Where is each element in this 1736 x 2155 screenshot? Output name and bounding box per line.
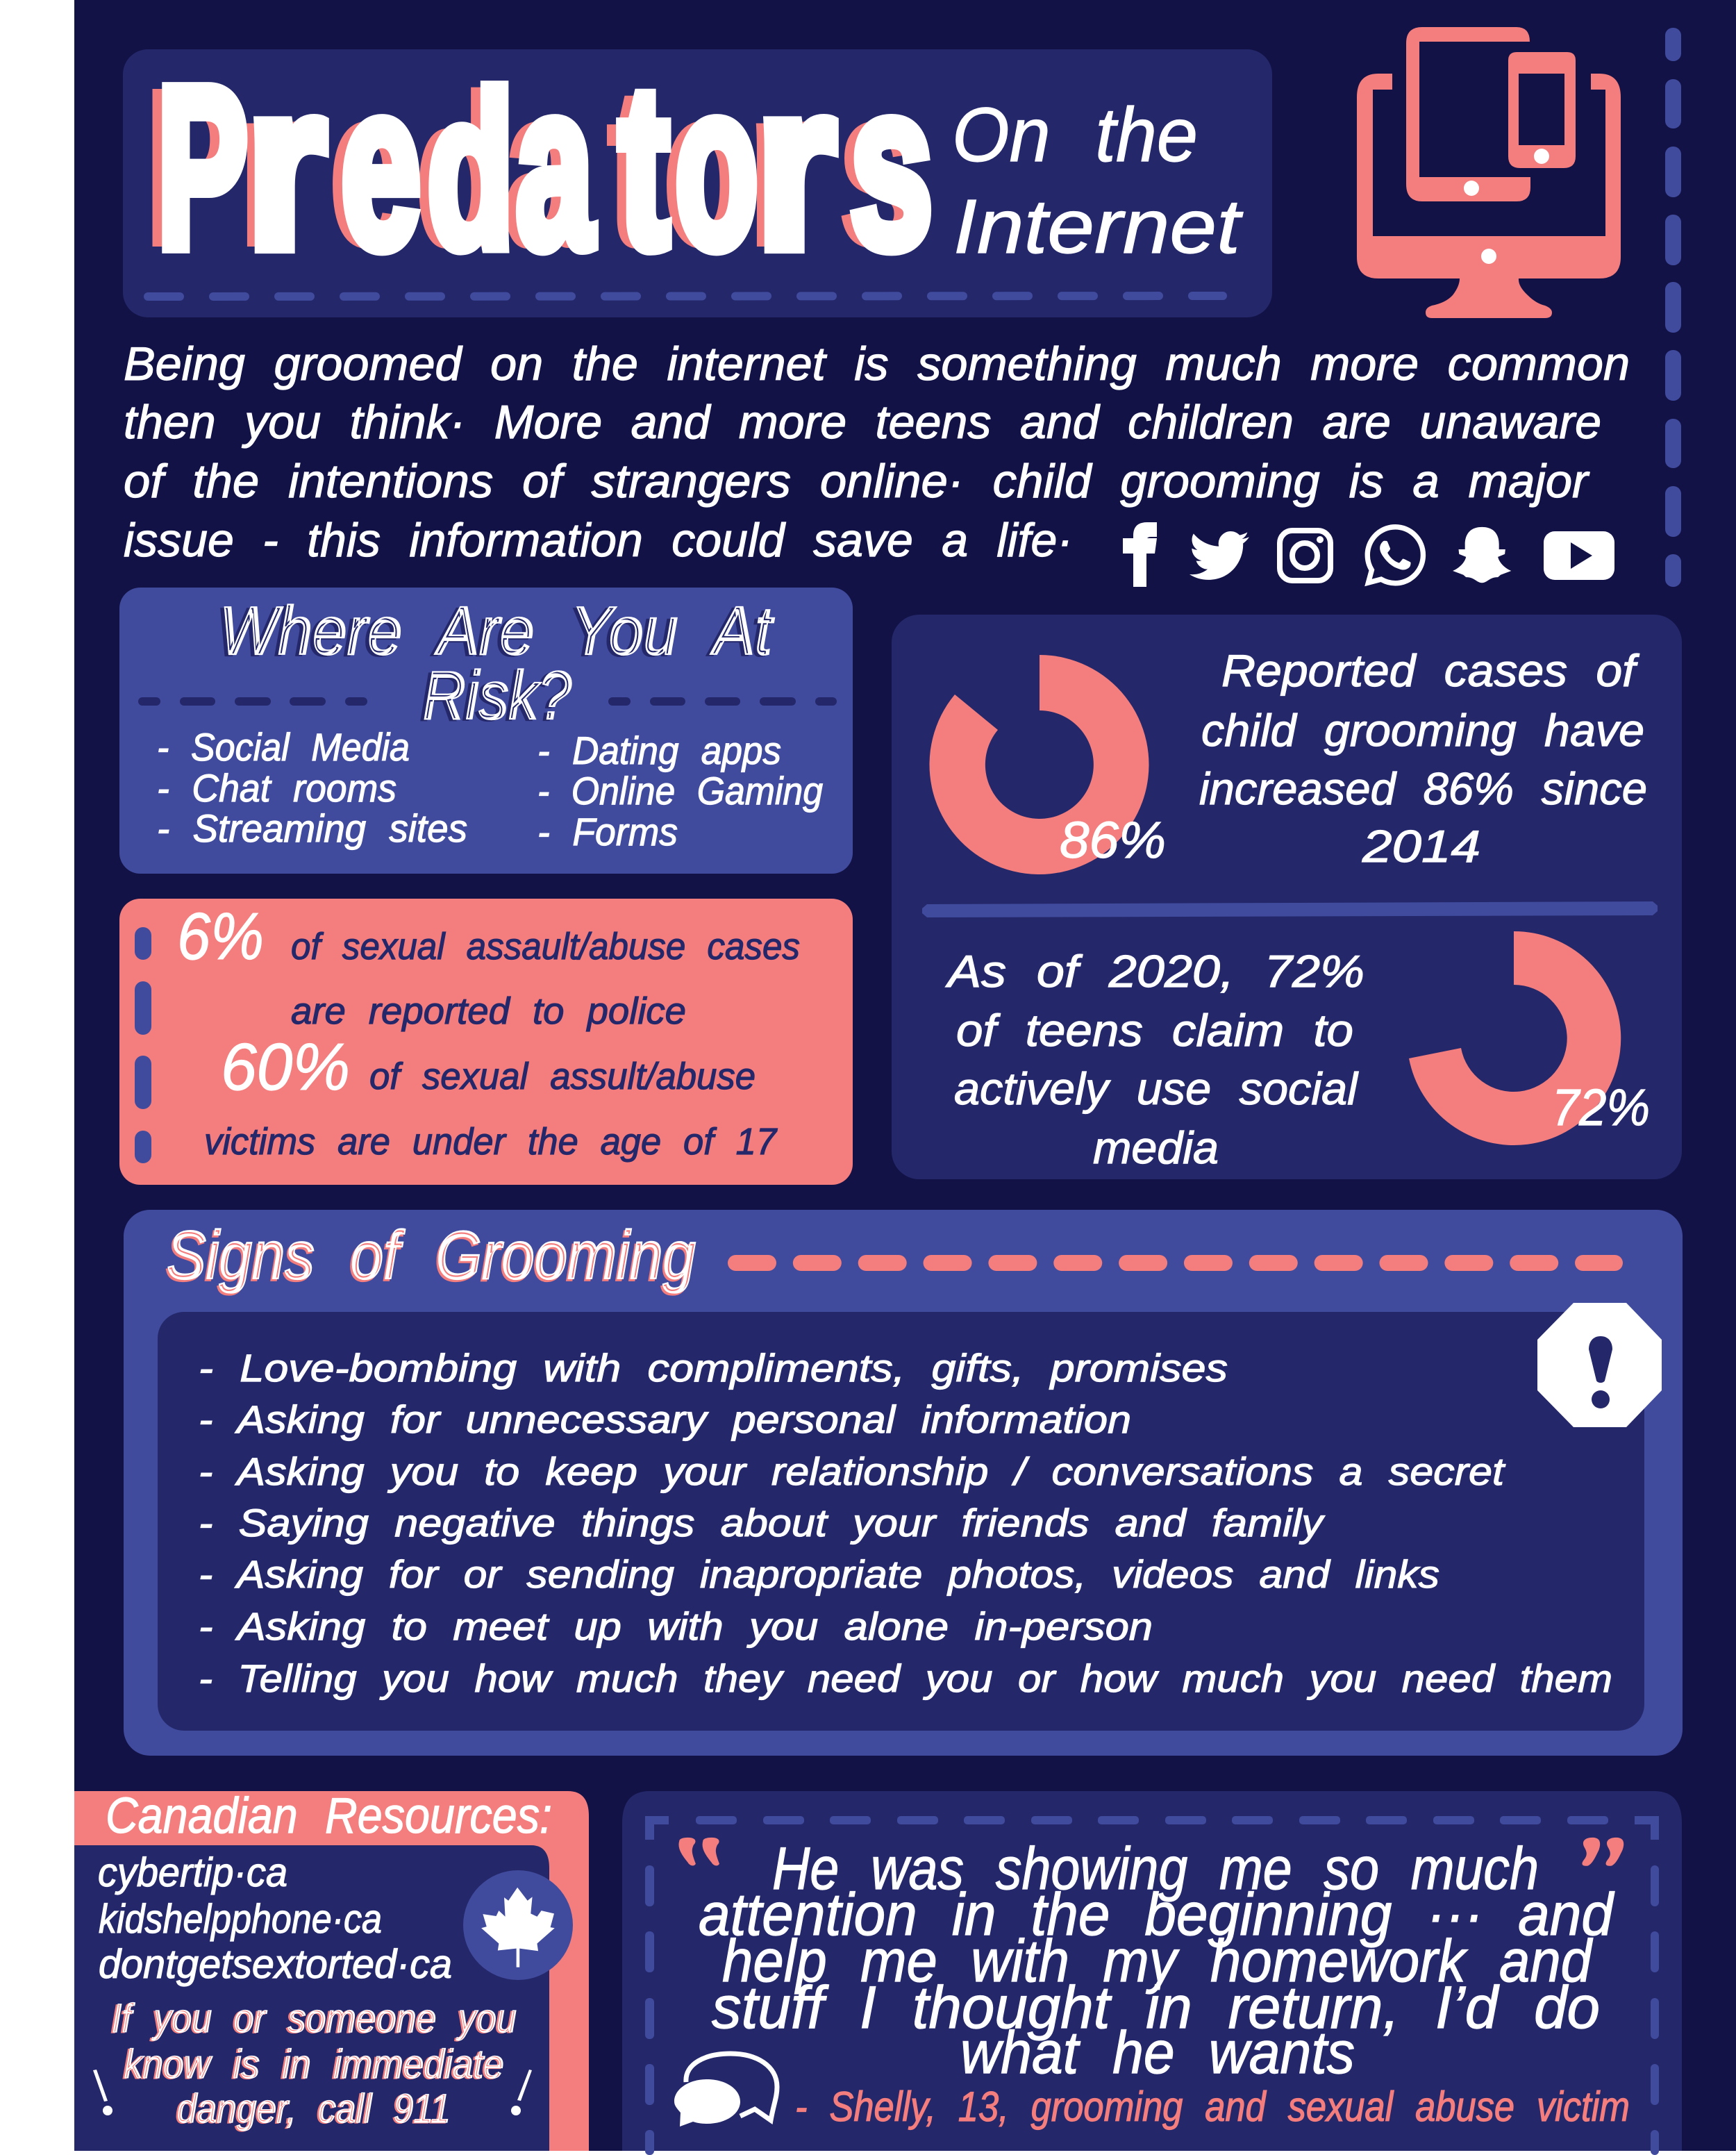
list panel: warning signs	[158, 1312, 1644, 1731]
text: 6 percent description: of sexual assault/abuse cases	[291, 926, 800, 967]
text: reported cases: increased 86% since	[1199, 763, 1647, 814]
panel: sexual assault statistics	[119, 899, 853, 1185]
subtitle: on the internet: Internet	[953, 184, 1244, 269]
text: quote: attention in the beginning ··· and	[699, 1881, 1615, 1948]
icon: devices	[1357, 27, 1621, 318]
dashed frame	[645, 1816, 1659, 2155]
text: resource links: dontgetsextorted·ca	[99, 1942, 452, 1987]
list panel: warning signs: - Asking for unnecessary personal information	[199, 1397, 1131, 1441]
title: predators: s	[850, 35, 933, 297]
callout: call 911	[93, 1996, 532, 2131]
icon: instagram	[1280, 531, 1330, 581]
decorative dashes	[1665, 28, 1681, 587]
text: reported cases: Reported cases of	[1221, 645, 1639, 696]
stat: 60 percent: 60%	[221, 1030, 350, 1104]
text: teens on social media	[945, 946, 1364, 1173]
panel: signs of grooming	[124, 1210, 1683, 1756]
panel: quote	[622, 1791, 1682, 2155]
heading: signs of grooming: Signs of Grooming	[167, 1217, 696, 1293]
stat: 6 percent: 6%	[177, 899, 264, 974]
title: predators: r	[756, 35, 835, 297]
text: quote: what he wants	[960, 2020, 1355, 2086]
text: reported cases: 2014	[1362, 821, 1480, 872]
heading: canadian resources: Canadian Resources:	[106, 1788, 552, 1844]
icon: whatsapp	[1364, 524, 1426, 586]
text: teens on social media: media	[1093, 1122, 1219, 1173]
list: risky places left: - Chat rooms	[157, 766, 397, 810]
text: quote attribution: - Shelly, 13, grooming and sexual abuse victim	[795, 2083, 1630, 2130]
list: risky places left: - Social Media	[157, 725, 410, 769]
icon: youtube	[1544, 531, 1614, 580]
title: predators	[153, 35, 933, 297]
title: predators: P	[157, 39, 248, 295]
icon: twitter	[1190, 531, 1249, 580]
intro text: Being groomed on the internet is something much more common	[124, 338, 1630, 390]
list panel: warning signs: - Asking for or sending inapropriate photos, videos and links	[199, 1552, 1439, 1596]
subtitle: on the internet	[952, 92, 1244, 269]
heading: where are you at risk	[219, 592, 774, 733]
text: resource links	[98, 1850, 452, 1987]
text: resource links: kidshelpphone·ca	[99, 1897, 382, 1942]
panel: where are you at risk	[119, 588, 853, 874]
panel: donut statistics	[892, 615, 1682, 1179]
title: predators: t	[619, 37, 669, 296]
list: risky places right: - Online Gaming	[537, 769, 823, 813]
intro text	[124, 338, 1630, 567]
list panel: warning signs: - Saying negative things about your friends and family	[199, 1501, 1325, 1545]
text: reported cases	[1199, 645, 1647, 872]
title: predators: o	[675, 35, 758, 297]
donut chart: 86 percent: 86%	[1060, 811, 1166, 869]
icons: social media	[1123, 522, 1614, 587]
title: predators: d	[427, 47, 515, 294]
list panel: warning signs: - Asking to meet up with you alone in-person	[199, 1604, 1153, 1648]
callout: call 911: If you or someone you	[112, 1996, 517, 2041]
text: 6 percent description	[291, 926, 800, 1032]
icon: maple leaf	[463, 1870, 573, 1980]
list: risky places left	[157, 725, 467, 850]
text: quote: stuff I thought in return, I’d do	[712, 1974, 1600, 2041]
list: risky places right: - Forms	[537, 810, 678, 854]
text: quote: He was showing me so much	[772, 1836, 1539, 1902]
icon: facebook	[1123, 522, 1157, 587]
title: predators: e	[341, 35, 421, 297]
text: teens on social media: of teens claim to	[956, 1005, 1353, 1056]
text: quote	[699, 1836, 1615, 2086]
title: predators: r	[247, 35, 326, 297]
list panel: warning signs: - Love-bombing with compliments, gifts, promises	[199, 1346, 1228, 1390]
text: resource links: cybertip·ca	[98, 1850, 287, 1895]
list: risky places right: - Dating apps	[537, 729, 781, 772]
intro text: then you think· More and more teens and children are unaware	[124, 396, 1601, 449]
list: risky places left: - Streaming sites	[157, 806, 467, 850]
text: teens on social media: actively use social	[954, 1063, 1359, 1114]
text: quote: help me with my homework and	[722, 1928, 1594, 1995]
icon: quotation marks	[678, 1838, 1624, 1866]
list: risky places right	[537, 729, 823, 854]
intro text: issue - this information could save a life·	[124, 514, 1073, 567]
panel: canadian resources	[74, 1788, 589, 2151]
icon: snapchat	[1453, 527, 1511, 583]
icon: speech bubbles	[674, 2054, 777, 2127]
text: 6 percent description: are reported to police	[291, 990, 686, 1032]
subtitle: on the internet: On the	[952, 92, 1198, 178]
panel: header	[123, 49, 1272, 317]
title: predators: a	[516, 35, 594, 297]
text: 60 percent description	[204, 1056, 778, 1163]
heading: where are you at risk: Risk?	[423, 657, 571, 733]
text: 60 percent description: of sexual assult/abuse	[369, 1056, 756, 1097]
list panel: warning signs: - Telling you how much they need you or how much you need them	[199, 1656, 1612, 1700]
heading: where are you at risk: Where Are You At	[219, 592, 774, 669]
text: 60 percent description: victims are under the age of 17	[204, 1121, 778, 1163]
donut chart: 86 percent	[930, 655, 1166, 874]
donut chart: 72 percent	[1409, 931, 1650, 1145]
text: reported cases: child grooming have	[1201, 705, 1644, 756]
callout: call 911: danger, call 911	[177, 2086, 451, 2131]
callout: call 911: know is in immediate	[124, 2042, 504, 2087]
text: teens on social media: As of 2020, 72%	[945, 946, 1364, 997]
list panel: warning signs: - Asking you to keep your relationship / conversations a secret	[199, 1449, 1506, 1493]
intro text: of the intentions of strangers online· child grooming is a major	[124, 455, 1589, 508]
donut chart: 72 percent: 72%	[1552, 1079, 1650, 1136]
icon: warning octagon	[1537, 1303, 1662, 1427]
